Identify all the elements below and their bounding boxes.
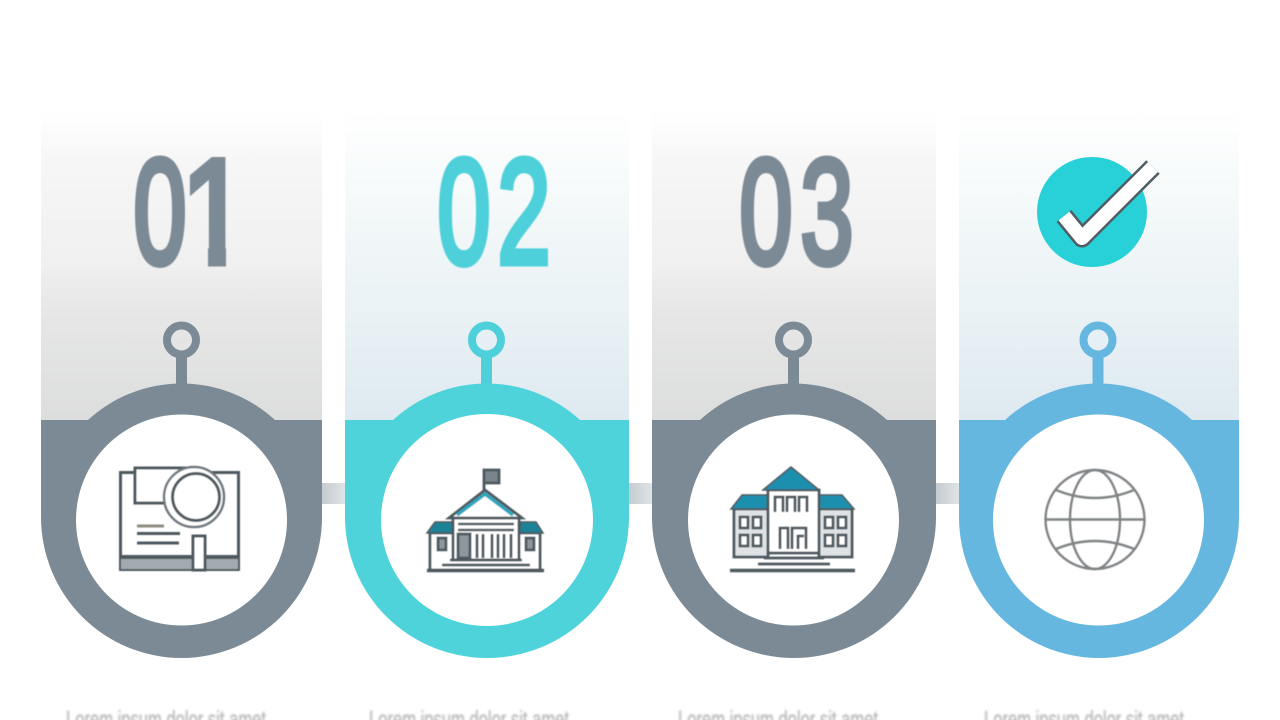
number 02: 0 xyxy=(438,128,490,295)
pin: step 04 xyxy=(1084,326,1112,390)
number 03: 0 xyxy=(740,128,792,295)
white circle: step 04 xyxy=(993,414,1204,626)
number 02: 2 xyxy=(498,128,550,295)
white circle: step 01 xyxy=(76,414,287,626)
connector: step 2 to 3 xyxy=(629,483,652,504)
icon: globe xyxy=(1046,470,1144,569)
number 03: 3 xyxy=(800,128,854,295)
white circle: step 02 xyxy=(381,414,593,626)
icon: university building xyxy=(730,467,855,570)
panel: step 03 xyxy=(652,110,936,658)
icon: school with flag xyxy=(427,470,544,570)
badge: step 02 xyxy=(345,383,629,658)
panel: step 01 xyxy=(41,110,322,658)
panel: step 04 xyxy=(959,110,1239,658)
badge: step 03 xyxy=(652,383,936,658)
pin: step 01 xyxy=(167,326,196,390)
number 01: 0 xyxy=(134,128,186,295)
pin: step 02 xyxy=(472,326,501,390)
number 01: 1 xyxy=(181,128,249,295)
icon: check mark badge xyxy=(1037,157,1153,267)
number 01 xyxy=(134,154,227,269)
pin: step 03 xyxy=(779,326,808,390)
connector: step 3 to 4 xyxy=(936,483,959,504)
icon: document with magnifier xyxy=(120,467,238,570)
badge: step 04 xyxy=(959,383,1239,658)
connector: step 1 to 2 xyxy=(322,483,345,504)
badge: step 01 xyxy=(41,383,322,658)
white circle: step 03 xyxy=(688,414,899,626)
panel: step 02 xyxy=(345,110,629,658)
